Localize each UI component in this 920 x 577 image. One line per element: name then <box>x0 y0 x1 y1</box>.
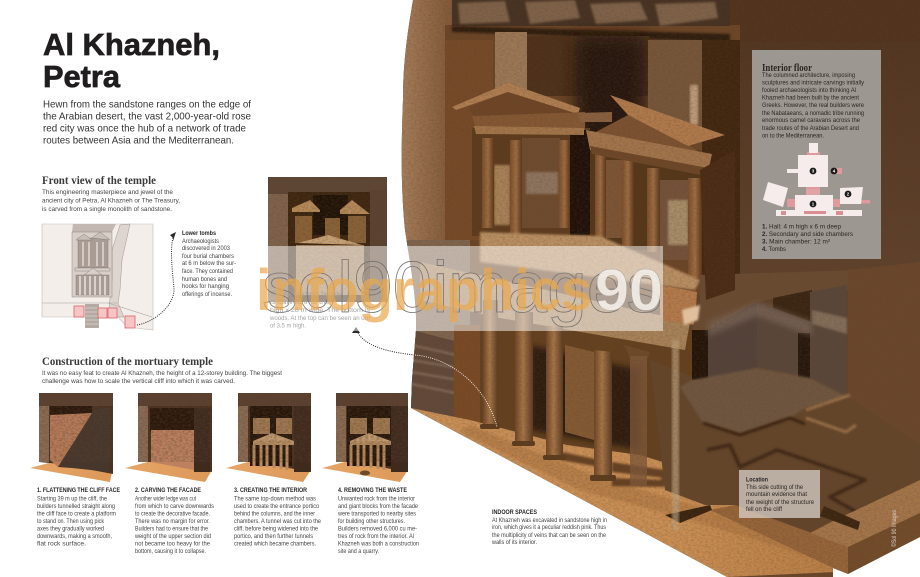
intro text: the Arabian desert, the vast 2,000-year-old rose <box>43 112 251 122</box>
left sandstone cliff <box>400 0 455 300</box>
callout: indoor spaces: iron, which gives it a peculiar reddish pink. Thus <box>492 524 606 531</box>
step 3 text: cliff, before being widened into the <box>234 526 318 532</box>
step images texture <box>39 406 408 462</box>
portico columns <box>480 300 650 486</box>
floor plan legend: 2. Secondary and side chambers <box>762 231 853 238</box>
step 1 text: flat rock surface. <box>37 540 86 548</box>
callout: lower tombs: four burial chambers <box>182 253 234 260</box>
interior floor description: on to the Mediterranean. <box>762 132 824 139</box>
interior chamber walls <box>692 270 860 397</box>
upper recess shadows <box>445 32 740 290</box>
right strata block <box>848 262 920 344</box>
callout: indoor spaces: walls of its interior. <box>491 539 537 546</box>
panel: location: mountain evidence that <box>746 491 807 498</box>
callout: lower tombs <box>182 230 236 298</box>
interior chamber floor <box>680 368 847 433</box>
callout: lower tombs: human bones and <box>182 276 228 283</box>
watermark: infographics <box>256 258 592 323</box>
main illustration: cutaway of Al Khazneh <box>400 0 920 577</box>
step 3 text: behind the columns, and the inner <box>234 510 315 518</box>
step 4 text: and giant blocks from the facade <box>338 503 418 510</box>
step 4 text: Khazneh was both a construction <box>338 540 419 548</box>
image credit: ©Sol 90 Images <box>891 510 898 547</box>
step 3 image: creating the interior <box>226 393 311 482</box>
step 1 text: axes they gradually worked <box>37 526 104 532</box>
step 2 text: Builders had to ensure that the <box>135 526 208 532</box>
step 1 image: flattening the cliff face <box>30 393 113 482</box>
step 4 text <box>337 487 419 555</box>
step 2 text: bottom, causing it to collapse. <box>135 548 206 555</box>
callout: lower tombs: Lower tombs <box>182 230 216 237</box>
temple facade <box>72 232 112 297</box>
construction description: It was no easy feat to create Al Khazneh, the height of a 12-storey building. The biggest <box>42 370 282 377</box>
brown floor to the right of the portico <box>650 360 739 506</box>
intro text <box>43 100 251 146</box>
photo caption: The Al Khazneh facade <box>270 291 343 298</box>
plan markers <box>810 168 851 207</box>
section: construction heading: Construction of the mortuary temple <box>42 354 213 368</box>
step 3 text: created which became chambers. <box>234 540 316 548</box>
interior floor description: fooled archaeologists into thinking Al <box>762 87 856 94</box>
front view description: is carved from a single monolith of sandstone. <box>42 206 172 213</box>
interior floor description <box>762 72 865 139</box>
step 2 text: There was no margin for error. <box>135 518 210 525</box>
step 1 text: Starting 39 m up the cliff, the <box>37 496 107 502</box>
watermark: 90 <box>595 258 663 323</box>
step 4 text: Unwanted rock from the interior <box>338 496 415 502</box>
photo caption: of 3.5 m high. <box>270 322 306 330</box>
photo caption: is carved into the <box>270 299 331 306</box>
photo caption: high x 28 m wide. The bottom is <box>270 307 370 314</box>
callout: indoor spaces: At Khazneh was excavated in sandstone high in <box>492 517 607 524</box>
step 1 text: downwards, making a smooth, <box>37 533 112 540</box>
interior floor description: Greeks. However, the real builders were <box>762 102 865 109</box>
step 1 text: 1. FLATTENING THE CLIFF FACE <box>37 487 120 494</box>
step 4 text: for building other structures. <box>338 518 405 525</box>
callout: lower tombs: offerings of incense. <box>182 291 232 298</box>
callout: indoor spaces <box>491 509 607 546</box>
interior floor description: sculptures and intricate carvings initially <box>762 80 865 87</box>
shaded wall block right of temple <box>700 150 735 300</box>
plan markers: 1 <box>812 202 815 207</box>
upper terrace ledge <box>480 232 700 290</box>
left tholos body <box>472 128 598 236</box>
portico entablature <box>420 262 690 350</box>
lower tombs highlighted <box>74 306 135 328</box>
panel: location <box>739 470 820 518</box>
lit entablature end <box>660 285 697 325</box>
title: Petra <box>43 59 121 94</box>
step 4 text: site and a quarry. <box>338 548 379 555</box>
intro text: routes between Asia and the Mediterranean. <box>43 136 234 146</box>
sand ground <box>411 408 850 577</box>
left tholos columns <box>482 138 570 234</box>
interior floor description: enormous camel caravans across the <box>762 117 861 124</box>
rock texture <box>400 0 920 577</box>
floor plan legend: 3. Main chamber: 12 m² <box>762 238 830 246</box>
callout: lower tombs: hooks for hanging <box>182 283 230 290</box>
photo caption: woods. At the top can be seen an urn <box>269 315 371 322</box>
step 2 text <box>134 487 214 555</box>
stairs <box>85 304 99 328</box>
interior floor description: Khazneh had been built by the ancient <box>762 95 859 102</box>
rock strata lower left <box>406 240 480 422</box>
floor plan legend: 1. Hall: 4 m high x 6 m deep <box>762 224 842 230</box>
heading: interior floor: Interior floor <box>762 63 812 74</box>
step 3 text: portico, and then further tunnels <box>234 533 313 540</box>
ground darker strip <box>461 426 797 552</box>
interior floor description: The columned architecture, imposing <box>762 72 856 79</box>
callout: indoor spaces: INDOOR SPACES <box>492 509 537 516</box>
step 2 text: from which to carve downwards <box>135 503 214 510</box>
step 2 image: carving the facade <box>125 393 212 482</box>
step 1 text: the cliff face to create a platform <box>37 510 116 518</box>
title <box>43 27 220 94</box>
rock crack on the right <box>108 224 130 317</box>
front view description <box>42 189 180 213</box>
step 3 text: The same top-down method was <box>234 496 316 502</box>
panel: location: This side cutting of the <box>746 484 804 491</box>
step 4 text: were transported to nearby sites <box>337 510 416 518</box>
panel: location: the weight of the structure <box>746 499 815 506</box>
watermark: sol90images <box>262 248 662 328</box>
portico back wall <box>480 325 692 462</box>
step 2 text: not became too heavy for the <box>135 540 211 548</box>
step 4 text: tres of rock from the interior. Al <box>338 533 414 540</box>
panel: interior floor <box>752 50 881 259</box>
floor plan <box>763 143 870 216</box>
right tholos body <box>590 150 700 260</box>
panel: location: fell on the cliff <box>746 506 782 513</box>
step 2 text: 2. CARVING THE FACADE <box>135 487 201 494</box>
plan markers: 2 <box>847 192 850 197</box>
callout: lower tombs: discovered in 2003 <box>182 245 231 252</box>
front view description: ancient city of Petra, Al Khazneh or The Treasury, <box>42 198 180 204</box>
step 3 text: used to create the entrance portico <box>234 503 319 510</box>
step 4 text: 4. REMOVING THE WASTE <box>338 487 407 494</box>
callout: lower tombs: face. They contained <box>182 268 233 275</box>
photo: front of the temple <box>268 177 387 302</box>
arrow: tomb to lower tombs note <box>137 232 176 325</box>
right rock mass <box>400 0 920 577</box>
column shadows on ground <box>560 452 668 487</box>
photo caption <box>269 291 371 330</box>
top right rock shading <box>725 0 920 42</box>
sun on entablature scroll <box>682 305 700 325</box>
step 3 text <box>234 487 321 548</box>
interior floor description: trade routes of the Arabian Desert and <box>762 125 860 132</box>
title: Al Khazneh, <box>43 27 220 62</box>
intro text: red city was once the hub of a network of trade <box>43 124 246 134</box>
front view description: This engineering masterpiece and jewel of the <box>42 189 174 196</box>
panel: location: Location <box>746 476 768 484</box>
callout: indoor spaces: the multiplicity of veins that can be seen on the <box>492 532 606 539</box>
intro text: Hewn from the sandstone ranges on the edge of <box>43 100 251 110</box>
plan markers: 4 <box>833 169 836 174</box>
construction description <box>42 370 282 385</box>
low plan walls on floor <box>703 395 865 522</box>
callout: lower tombs: Archaeologists <box>182 238 219 245</box>
floor plan legend: 4. Tombs <box>762 246 786 253</box>
step 4 image: removing the waste <box>322 393 408 482</box>
left pediment <box>452 83 585 135</box>
arrow: photo to main illustration <box>352 327 497 427</box>
step 2 text: weight of the upper section did <box>134 533 211 540</box>
right tholos columns <box>595 150 702 278</box>
faded pilaster column <box>672 340 679 530</box>
construction description: challenge was how to scale the vertical cliff into which it was carved. <box>42 378 235 385</box>
top rock band <box>452 0 730 42</box>
step 2 text: to create the decorative facade. <box>135 510 210 518</box>
step 4 text: Builders removed 6,000 cu me- <box>338 526 417 532</box>
callout: lower tombs: at 6 m below the sur- <box>182 260 236 267</box>
step 1 text: to stand on. Then using pick <box>37 518 105 525</box>
line drawing: temple front view <box>42 224 153 330</box>
section: front view heading: Front view of the temple <box>42 175 156 187</box>
step 2 text: Another wider ledge was cut <box>135 496 196 502</box>
floor plan legend <box>762 224 853 253</box>
plan markers: 3 <box>812 169 815 174</box>
step 3 text: chambers. A tunnel was cut into the <box>234 518 321 525</box>
step 1 text <box>37 487 120 548</box>
cliff upper wall <box>445 25 740 295</box>
step 1 text: builders tunnelled straight along <box>37 503 115 510</box>
step 3 text: 3. CREATING THE INTERIOR <box>234 487 307 494</box>
right pediment <box>578 95 725 176</box>
front slab face <box>665 480 920 574</box>
interior floor description: the Nabataeans, a nomadic tribe running <box>762 110 865 117</box>
